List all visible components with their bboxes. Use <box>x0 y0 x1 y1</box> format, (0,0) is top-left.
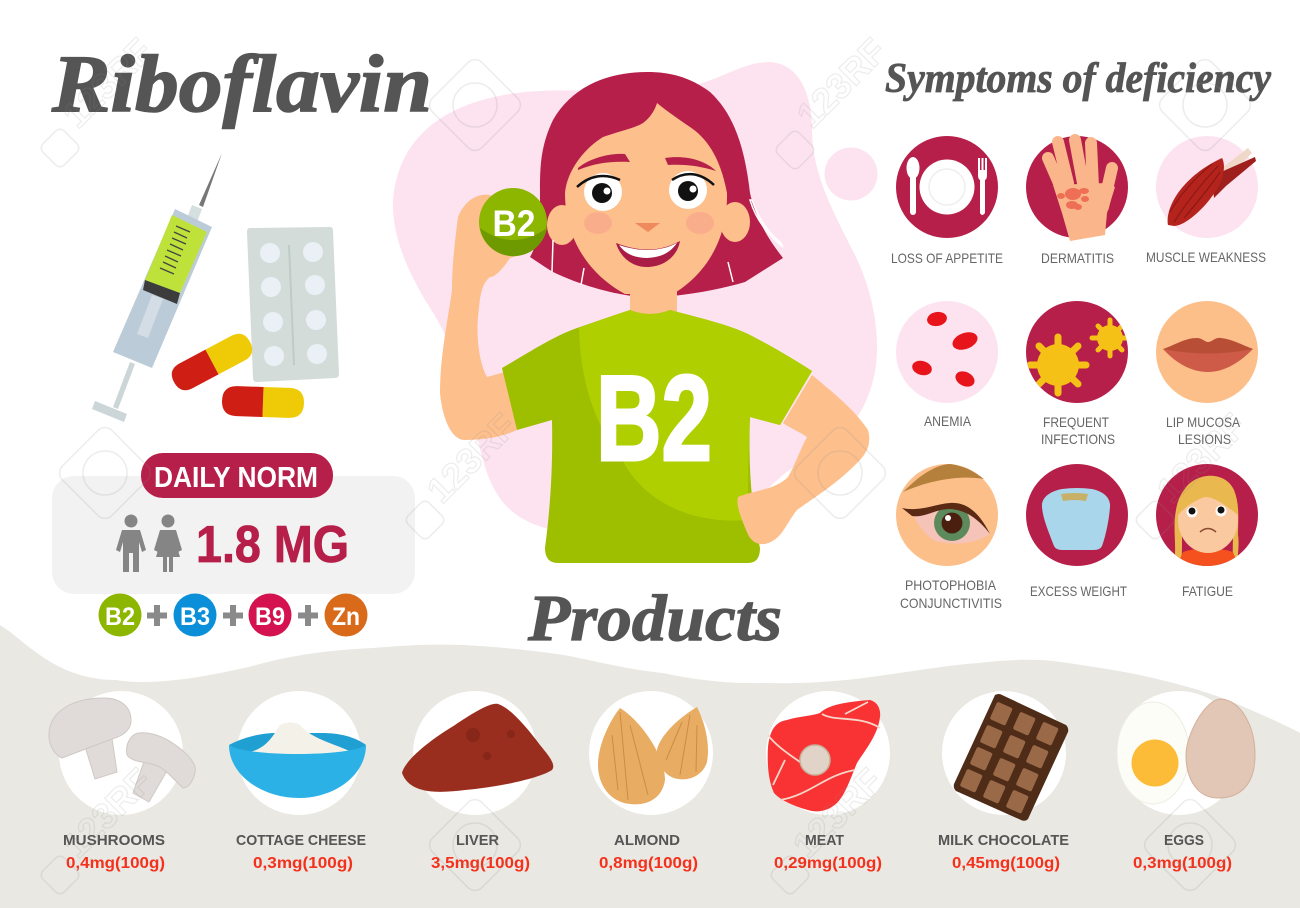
symptom: photophobia conjunctivitis: CONJUNCTIVITIS <box>900 595 1002 611</box>
symptom: loss of appetite: LOSS OF APPETITE <box>891 250 1003 266</box>
product: eggs: EGGS <box>1164 832 1204 849</box>
watermarks: 123RF <box>55 30 160 136</box>
vitamin ball: B2 <box>492 203 536 244</box>
symptom: dermatitis: DERMATITIS <box>1041 250 1114 266</box>
product: cottage cheese: 0,3mg(100g) <box>253 855 353 872</box>
product: milk chocolate: MILK CHOCOLATE <box>938 832 1069 849</box>
vitamin badges: B9 <box>255 603 285 631</box>
symptom: lip mucosa lesions <box>1156 301 1258 447</box>
symptom: lip mucosa lesions: LIP MUCOSA <box>1166 414 1241 430</box>
product: almond <box>589 691 713 872</box>
decorative pink dot <box>824 148 878 200</box>
vitamin ball <box>479 188 547 256</box>
product: liver <box>402 691 553 872</box>
cheeks <box>584 212 714 234</box>
product: meat <box>766 691 890 872</box>
forelock <box>637 92 653 123</box>
symptom: muscle weakness: MUSCLE WEAKNESS <box>1146 249 1266 265</box>
symptom: excess weight <box>1026 464 1128 599</box>
neck <box>630 288 677 316</box>
icon: blister pack <box>247 227 339 382</box>
product: liver: 3,5mg(100g) <box>431 855 530 872</box>
heading: products: Products <box>527 582 782 655</box>
title: Riboflavin <box>51 38 432 129</box>
panel: daily norm <box>52 453 415 594</box>
right arm and hand <box>737 375 869 544</box>
face <box>565 103 727 294</box>
product: milk chocolate <box>938 691 1069 872</box>
symptom: frequent infections <box>1026 301 1128 447</box>
symptom: frequent infections: INFECTIONS <box>1041 431 1115 447</box>
product: cottage cheese: COTTAGE CHEESE <box>236 832 366 849</box>
watermarks: 123RF <box>785 760 890 866</box>
symptom: frequent infections: FREQUENT <box>1043 414 1109 430</box>
vitamin badges: B2 <box>105 603 135 631</box>
eyes <box>577 171 714 211</box>
mouth <box>616 241 680 267</box>
symptom: muscle weakness <box>1146 136 1266 265</box>
character: girl with B2 vitamin <box>440 72 869 563</box>
vitamin badges: B3 <box>180 603 210 631</box>
dose value: 1.8 MG <box>196 516 349 574</box>
icon: syringe <box>92 153 222 422</box>
hair <box>530 72 783 296</box>
badge: daily norm <box>141 453 333 498</box>
background blob <box>393 62 877 536</box>
left arm and hand <box>440 195 530 440</box>
product: mushrooms <box>49 691 195 872</box>
symptom: lip mucosa lesions: LESIONS <box>1178 431 1231 447</box>
nose <box>635 223 660 232</box>
watermarks: 123RF <box>419 405 524 511</box>
product: milk chocolate: 0,45mg(100g) <box>952 855 1060 872</box>
ears <box>547 202 750 245</box>
watermarks: 123RF <box>55 760 160 866</box>
product: meat: MEAT <box>805 832 844 849</box>
product: liver: LIVER <box>456 832 499 849</box>
symptom: loss of appetite <box>891 136 1003 266</box>
eyebrows <box>578 154 716 171</box>
product: cottage cheese <box>229 691 366 872</box>
badge: daily norm: DAILY NORM <box>154 462 318 494</box>
symptom: photophobia conjunctivitis: PHOTOPHOBIA <box>905 577 997 593</box>
product: almond: ALMOND <box>614 832 680 849</box>
symptom: dermatitis <box>1026 136 1128 266</box>
icon: capsule two <box>222 386 304 418</box>
vitamin badges: Zn <box>332 603 360 631</box>
symptom: photophobia conjunctivitis <box>896 464 1002 611</box>
t-shirt <box>502 310 812 563</box>
symptom: fatigue <box>1156 464 1258 599</box>
symptom: fatigue: FATIGUE <box>1182 583 1233 599</box>
product: eggs: 0,3mg(100g) <box>1133 855 1232 872</box>
shirt text B2: B2 <box>596 350 712 486</box>
product: almond: 0,8mg(100g) <box>599 855 698 872</box>
product: meat: 0,29mg(100g) <box>774 855 882 872</box>
icon: capsule one <box>167 329 257 395</box>
symptom: excess weight: EXCESS WEIGHT <box>1030 583 1127 599</box>
heading: symptoms of deficiency: Symptoms of deficiency <box>885 56 1271 102</box>
watermarks: 123RF <box>789 30 894 136</box>
product: eggs <box>1117 691 1255 872</box>
t-shirt highlight <box>579 310 812 521</box>
product: mushrooms: 0,4mg(100g) <box>66 855 165 872</box>
vitamin badges <box>98 594 368 636</box>
symptom: anemia: ANEMIA <box>924 413 972 429</box>
products band <box>0 625 1300 908</box>
product: mushrooms: MUSHROOMS <box>63 832 165 849</box>
panel background <box>52 476 415 594</box>
icon: man and woman <box>116 514 182 572</box>
watermarks: 123RF <box>1149 405 1254 511</box>
hair highlight <box>552 200 783 285</box>
symptom: anemia <box>896 301 998 429</box>
